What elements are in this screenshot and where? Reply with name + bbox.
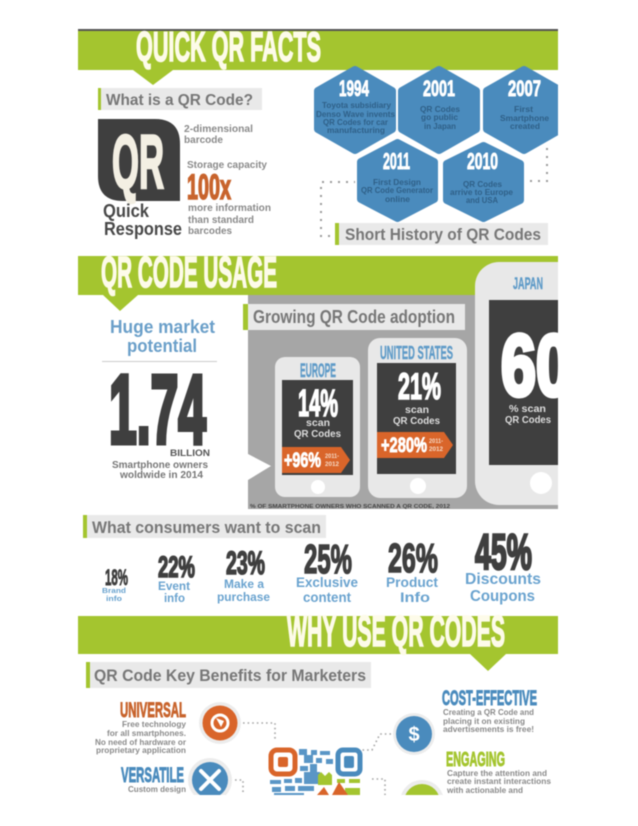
hexagon: 1994: manufacturing — [327, 125, 385, 135]
benefit: universal: proprietary application — [96, 745, 186, 755]
phone: United States: 2011- — [429, 439, 443, 445]
statistic: 45% discounts coupons: Coupons — [470, 588, 535, 605]
header band: why use QR codes — [77, 614, 559, 672]
statistic: 1.74 billion: 1.74 — [109, 355, 206, 464]
benefit: universal: Free technology — [122, 719, 186, 729]
hexagon: 2007: created — [510, 121, 540, 131]
phone: Japan: JAPAN — [513, 274, 543, 293]
benefit: cost-effective: COST-EFFECTIVE — [442, 687, 537, 710]
text: quick response: Quick — [103, 201, 150, 221]
statistic: 26% product info: Product — [386, 574, 438, 590]
statistic: 100x: 100x — [187, 168, 231, 207]
phone: Japan: 60 — [501, 318, 571, 414]
heading: growing QR code adoption — [243, 304, 465, 330]
text: QR code facts: than standard — [188, 214, 254, 226]
hexagon: 2011: QR Code Generator — [361, 185, 434, 195]
phone: United States: scan — [405, 405, 429, 416]
statistic: 45% discounts coupons — [465, 524, 541, 605]
phone: Japan — [474, 261, 559, 506]
statistic: 22% event info: 22% — [158, 551, 195, 584]
benefit: versatile: Custom design — [128, 784, 186, 794]
header band: QR code usage: QR CODE USAGE — [101, 248, 277, 297]
icon: colored QR code — [270, 749, 360, 795]
hexagon: 2007: First — [514, 104, 533, 114]
benefit: engaging: with actionable and — [446, 785, 523, 795]
phone: United States: 21% — [398, 366, 441, 407]
phone: United States: +280% — [381, 434, 427, 457]
statistic: 22% event info: info — [164, 591, 185, 605]
statistic: 23% make a purchase: purchase — [217, 590, 270, 604]
benefit: cost-effective: advertisements is free! — [443, 724, 534, 734]
phone: Europe: EUROPE — [300, 361, 336, 382]
text: huge market potential — [110, 317, 215, 356]
benefit: universal: UNIVERSAL — [120, 699, 186, 722]
hexagon: 2010 — [447, 146, 520, 218]
benefit: cost-effective: Creating a QR Code and — [443, 707, 534, 717]
statistic: 18% brand info: info — [106, 594, 122, 603]
text: QR code facts: barcodes — [188, 225, 232, 237]
phone: United States: 2012 — [429, 447, 444, 453]
statistic: 45% discounts coupons: 45% — [475, 524, 532, 580]
statistic: 22% event info: Event — [158, 579, 190, 593]
header band: quick QR facts — [78, 23, 558, 85]
footnote: % OF SMARTPHONE OWNERS WHO SCANNED A QR CODE, 2012 — [250, 504, 450, 510]
statistic: 26% product info: 26% — [388, 535, 438, 581]
phone: Japan: QR Codes — [505, 415, 551, 426]
statistic: 25% exclusive content: Exclusive — [296, 574, 358, 590]
hexagon: 2007: Smartphone — [500, 113, 549, 123]
phone: Europe — [275, 357, 360, 497]
heading: QR code key benefits: QR Code Key Benefits for Marketers — [94, 666, 366, 685]
statistic: 18% brand info: Brand — [102, 586, 126, 595]
benefit: universal: No need of hardware or — [95, 737, 187, 747]
heading: QR code key benefits — [86, 662, 371, 688]
text: quick response — [103, 201, 182, 239]
benefit: cost-effective — [393, 687, 537, 755]
phone: Japan: % scan — [509, 404, 546, 415]
statistic: 23% make a purchase: Make a — [224, 577, 264, 591]
hexagon: 2010: arrive to Europe — [450, 187, 513, 197]
text: QR code facts: more information — [188, 202, 271, 214]
phone: Europe: 2012 — [325, 462, 340, 468]
text: QR code facts: Storage capacity — [187, 159, 267, 171]
hexagon: 2007: 2007 — [508, 76, 541, 101]
hexagon: 2001 — [402, 70, 476, 150]
hexagon: 2001: 2001 — [423, 76, 455, 101]
hexagon: 1994: Denso Wave invents — [316, 109, 395, 119]
statistic: 23% make a purchase: 23% — [226, 545, 265, 581]
hexagon: 2011 — [361, 143, 434, 218]
heading: growing QR code adoption: Growing QR Code adoption — [253, 307, 455, 327]
icon: dollar — [393, 713, 435, 755]
hexagon: 2010: QR Codes — [463, 179, 502, 189]
hexagon: 2001: go public — [421, 112, 458, 122]
hexagon: 2001: in Japan — [424, 121, 456, 131]
statistic: 25% exclusive content — [296, 543, 358, 603]
benefit: engaging: Capture the attention and — [447, 768, 547, 778]
statistic: 1.74 billion: woldwide in 2014 — [119, 469, 203, 481]
text: QR code facts: barcode — [184, 134, 223, 146]
hexagon: 2011: online — [385, 194, 410, 204]
phone: Europe: scan — [306, 418, 330, 429]
heading: what is a QR code: What is a QR Code? — [106, 92, 253, 109]
statistic: 18% brand info: 18% — [105, 565, 128, 590]
connector dots — [235, 723, 391, 795]
icon: tools — [188, 758, 232, 796]
statistic: 25% exclusive content: 25% — [304, 536, 352, 582]
benefit: cost-effective: placing it on existing — [443, 716, 525, 726]
icon: dollar: $ — [408, 724, 420, 746]
statistic: 45% discounts coupons: Discounts — [465, 571, 541, 588]
icon: QR logo block: QR — [112, 120, 164, 205]
hexagon: 1994 — [316, 70, 395, 150]
benefit: versatile — [120, 758, 232, 796]
statistic: 1.74 billion — [110, 372, 210, 479]
hexagon: 2007 — [487, 70, 561, 150]
statistic: 22% event info — [158, 551, 195, 605]
hexagon: 1994: 1994 — [339, 76, 369, 101]
heading: what consumers want to scan: What consumers want to scan — [92, 518, 321, 537]
statistic: 26% product info — [386, 542, 439, 603]
phone: United States — [368, 338, 467, 498]
benefit: engaging: create instant interactions — [447, 776, 551, 786]
phone: United States: QR Codes — [393, 416, 440, 427]
benefit: universal — [95, 699, 241, 755]
icon: QR logo block — [98, 119, 180, 205]
phone: Europe: +96% — [284, 449, 321, 472]
statistic: 23% make a purchase — [217, 545, 270, 604]
phone: United States: UNITED STATES — [380, 343, 453, 363]
hexagon: 1994: Toyota subsidiary — [322, 100, 391, 110]
hexagon: 2011: First Design — [373, 177, 421, 187]
text: huge market potential: Huge market — [110, 317, 215, 337]
text: QR code facts — [184, 123, 271, 237]
benefit: engaging — [400, 749, 551, 824]
benefit: versatile: VERSATILE — [121, 764, 184, 787]
text: huge market potential: potential — [127, 336, 197, 356]
header band: QR code usage — [78, 248, 558, 311]
icon: green circle — [400, 780, 444, 824]
statistic: 26% product info: Info — [400, 589, 430, 605]
hexagon: 1994: QR Codes for car — [323, 117, 389, 127]
statistic: 18% brand info — [102, 565, 128, 603]
phone: Europe: QR Codes — [294, 429, 341, 440]
benefit: engaging: ENGAGING — [446, 749, 505, 771]
text: QR code facts: 2-dimensional — [184, 123, 253, 135]
text: quick response: Response — [104, 219, 182, 239]
statistic: 25% exclusive content: content — [303, 589, 351, 605]
phone: Europe: 14% — [298, 383, 338, 425]
hexagon: 2010: and USA — [466, 195, 498, 205]
heading: short history of QR codes: Short History of QR Codes — [345, 225, 541, 244]
panel: growing QR code adoption — [243, 262, 595, 510]
phone: Europe: 2011- — [325, 454, 339, 460]
icon: globe — [199, 702, 241, 744]
title: quick QR facts: QUICK QR FACTS — [136, 23, 321, 70]
timeline dots — [321, 148, 547, 236]
hexagon: 2001: QR Codes — [420, 104, 460, 114]
hexagon: 2011: 2011 — [383, 148, 410, 174]
benefit: universal: for all smartphones. — [107, 728, 186, 738]
statistic: 1.74 billion: Smartphone owners — [112, 459, 208, 471]
statistic: 1.74 billion: BILLION — [170, 448, 210, 459]
hexagon: 2010: 2010 — [467, 148, 498, 174]
